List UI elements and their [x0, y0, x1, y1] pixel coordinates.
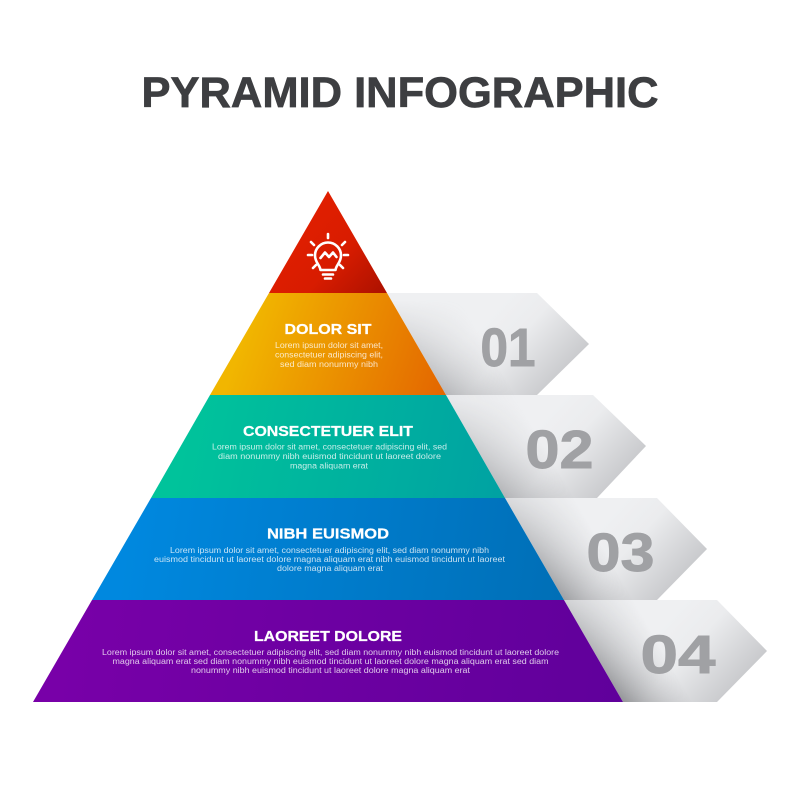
arrow tab 03: 03: [586, 523, 654, 583]
pyramid tier: consectetuer elit: CONSECTETUER ELIT: [243, 423, 413, 440]
pyramid tier: nibh euismod: dolore magna aliquam erat: [277, 564, 384, 573]
pyramid tier: apex with bulb icon: [269, 191, 387, 293]
icon: light bulb: [308, 234, 348, 278]
pyramid tier: laoreet dolore: [33, 600, 623, 702]
pyramid tier: nibh euismod: NIBH EUISMOD: [267, 526, 389, 542]
pyramid tier: nibh euismod: Lorem ipsum dolor sit amet, consectetuer adipiscing elit, sed diam nonummy nibh: [170, 546, 489, 555]
pyramid tier: nibh euismod: euismod tincidunt ut laoreet dolore magna aliquam erat nibh euismod tincidunt ut laoreet: [154, 555, 506, 564]
pyramid tier: dolor sit: consectetuer adipiscing elit,: [275, 350, 383, 360]
arrow tab 04: [564, 600, 767, 702]
arrow tab 01: [387, 293, 589, 395]
title: PYRAMID INFOGRAPHIC: [142, 69, 658, 117]
pyramid tier: laoreet dolore: Lorem ipsum dolor sit amet, consectetuer adipiscing elit, sed diam nonummy nibh euismod tincidunt ut laoreet dolore: [102, 648, 560, 657]
arrow tab 04: 04: [640, 625, 716, 685]
pyramid tier: consectetuer elit: magna aliquam erat: [290, 462, 369, 470]
pyramid tier: dolor sit: sed diam nonummy nibh: [280, 360, 378, 369]
pyramid tier: dolor sit: DOLOR SIT: [284, 321, 372, 338]
arrow tab 02: [446, 395, 646, 498]
pyramid tier: nibh euismod: [92, 498, 564, 600]
pyramid tier: laoreet dolore: nonummy nibh euismod tincidunt ut laoreet dolore magna aliquam erat: [191, 666, 471, 675]
pyramid tier: dolor sit: [210, 293, 446, 395]
arrow tab 03: [505, 498, 707, 600]
arrow tab 01: 01: [480, 318, 536, 378]
pyramid tier: laoreet dolore: LAOREET DOLORE: [254, 628, 402, 645]
pyramid tier: laoreet dolore: magna aliquam erat sed diam nonummy nibh euismod tincidunt ut laoreet dolore magna aliquam erat sed diam: [112, 657, 549, 666]
arrow tab 02: 02: [526, 420, 594, 480]
pyramid tier: consectetuer elit: Lorem ipsum dolor sit amet, consectetuer adipiscing elit, sed: [212, 442, 447, 452]
pyramid tier: consectetuer elit: diam nonummy nibh euismod tincidunt ut laoreet dolore: [218, 452, 442, 461]
pyramid tier: consectetuer elit: [151, 395, 505, 498]
pyramid tier: dolor sit: Lorem ipsum dolor sit amet,: [275, 341, 383, 350]
